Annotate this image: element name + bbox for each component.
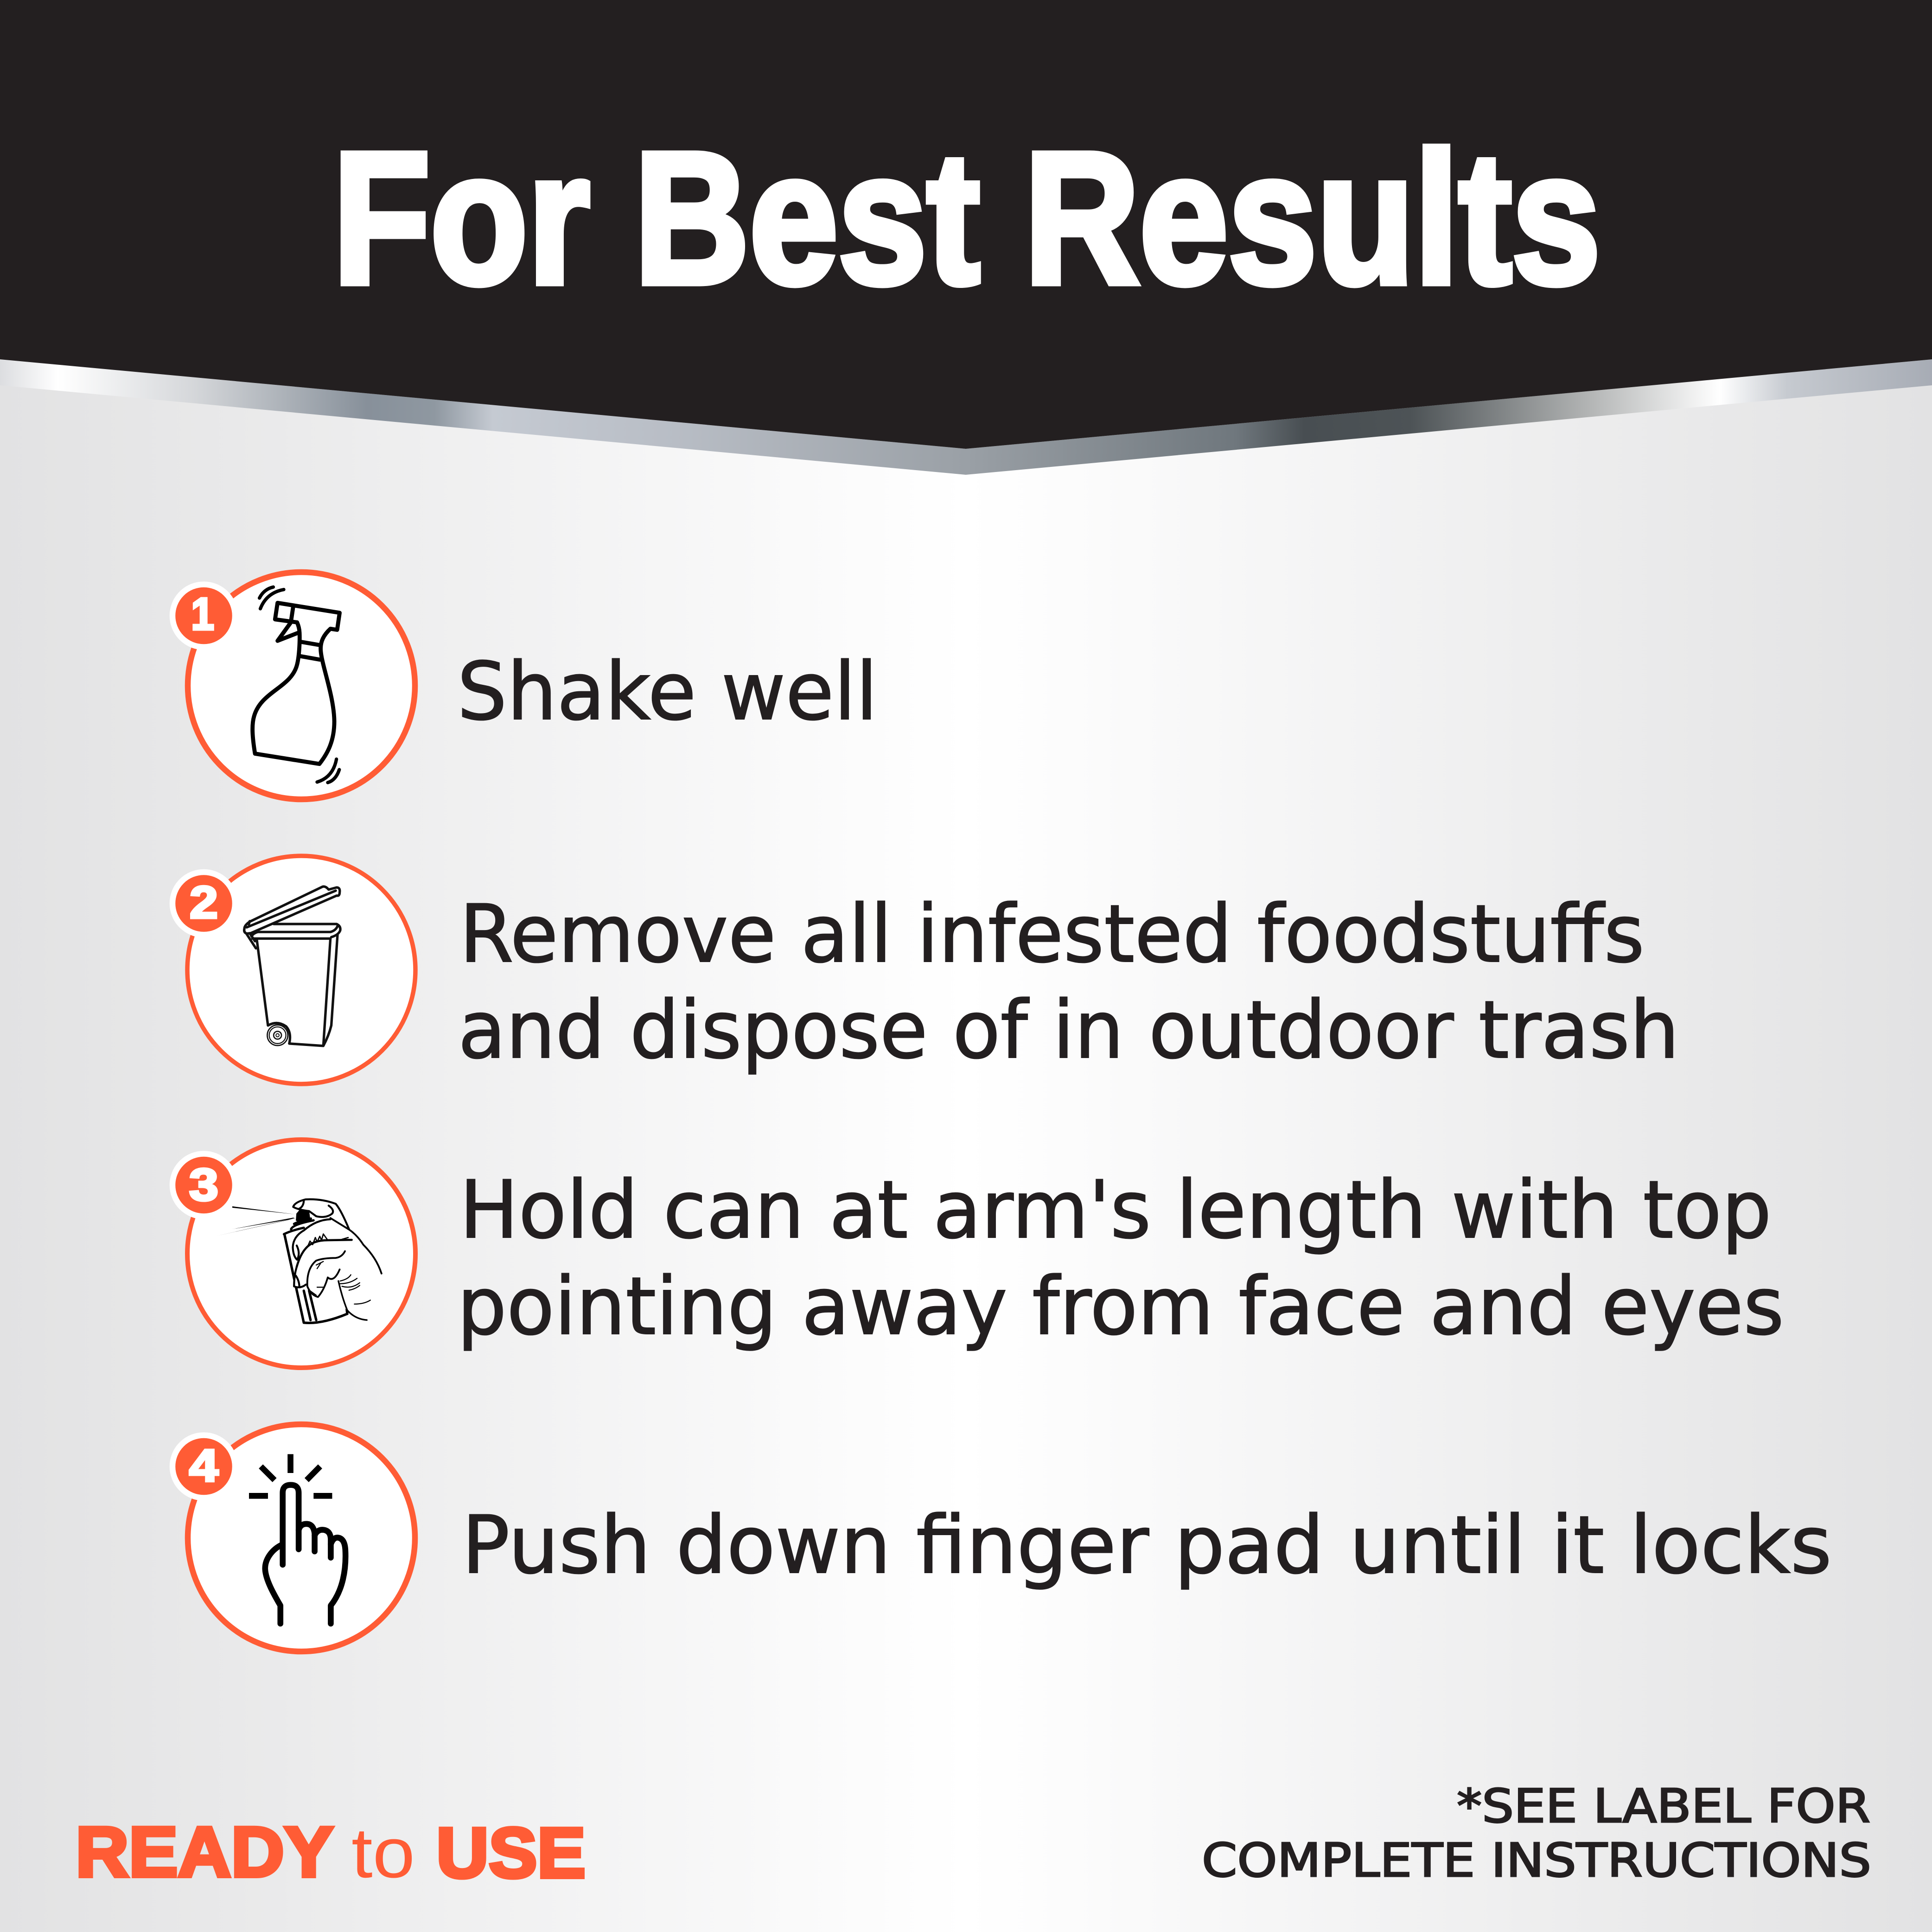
number badge 3 (172, 1154, 235, 1217)
step 3 text: pointing away from face and eyes (457, 1260, 1784, 1353)
number badge 3: 3 (189, 1159, 218, 1210)
number badge 4 (172, 1435, 235, 1498)
ready to use tagline: USE (436, 1813, 586, 1893)
step 3 text: Hold can at arm's length with top (459, 1163, 1772, 1256)
step 2 text: and dispose of in outdoor trash (458, 983, 1679, 1077)
label footnote: *SEE LABEL FOR (1457, 1779, 1870, 1833)
step 2 (172, 856, 1679, 1084)
icon circle 1 (188, 572, 415, 799)
icon circle 3 (187, 1140, 415, 1368)
step 3 text (457, 1163, 1784, 1353)
title: For Best Results (333, 113, 1600, 323)
hand outline (293, 1199, 382, 1320)
number badge 1: 1 (191, 588, 214, 639)
header panel (0, 0, 1932, 449)
icon: wheeled trash bin (244, 886, 340, 1046)
icon: finger pressing (249, 1454, 345, 1624)
ready to use tagline: READY (76, 1812, 333, 1892)
label footnote (1202, 1779, 1871, 1887)
ready to use tagline (76, 1812, 586, 1893)
step 2 text: Remove all infested foodstuffs (459, 887, 1645, 981)
number badge 2: 2 (190, 877, 218, 928)
step 1 (172, 572, 878, 799)
icon circle 2 (187, 856, 415, 1084)
number badge 4: 4 (189, 1440, 218, 1491)
spray can (284, 1218, 347, 1323)
number badge 1 (172, 584, 235, 647)
icon circle 4 (188, 1424, 415, 1651)
step 3 (172, 1140, 1784, 1368)
step 1 text: Shake well (457, 645, 878, 738)
hand white fill (293, 1199, 382, 1320)
spray mist and nozzle (217, 1206, 310, 1236)
step 4 text: Push down finger pad until it locks (462, 1498, 1832, 1592)
metallic chevron band (0, 359, 1932, 475)
icon: spray bottle shaking (253, 587, 340, 783)
icon: hand holding spray can (217, 1199, 382, 1323)
number badge 2 (172, 872, 235, 935)
step 4 (172, 1424, 1832, 1651)
ready to use tagline: to (351, 1813, 415, 1893)
label footnote: COMPLETE INSTRUCTIONS (1202, 1833, 1871, 1887)
step 2 text (458, 887, 1679, 1077)
